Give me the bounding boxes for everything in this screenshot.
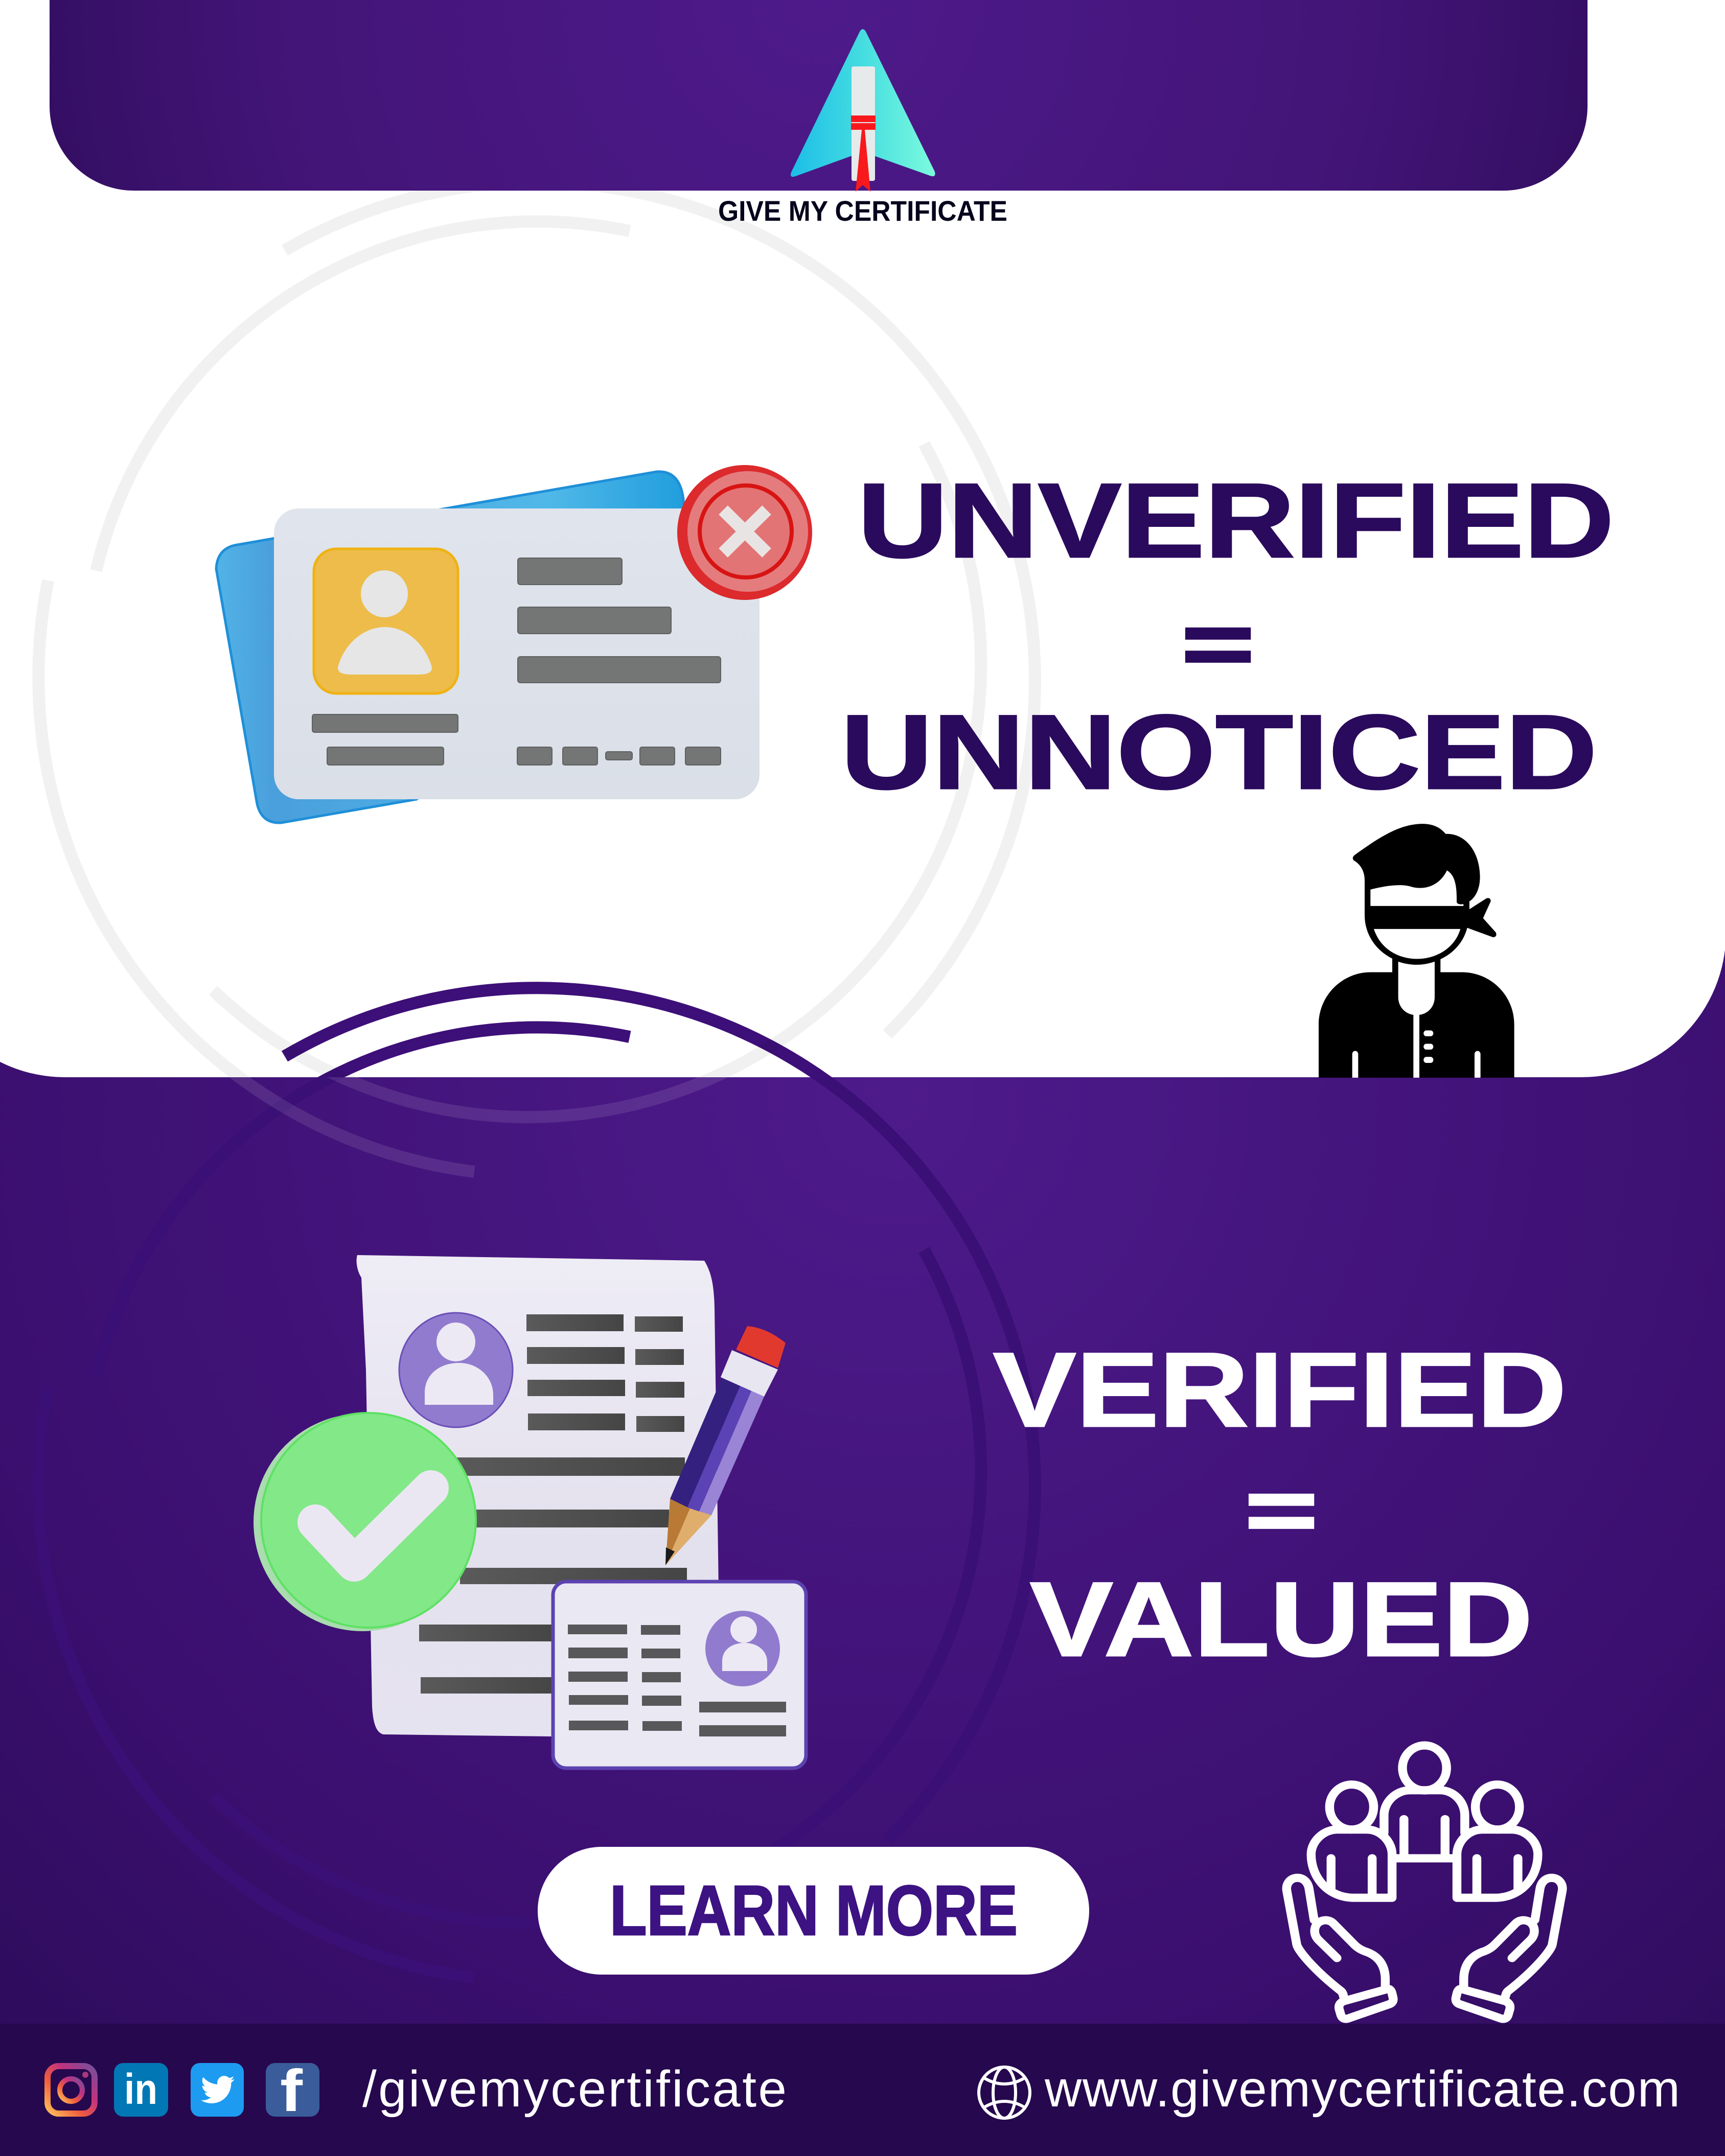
person body xyxy=(338,627,432,675)
equals sign: = xyxy=(1182,596,1254,692)
paper sheet xyxy=(357,1255,719,1738)
icon: facebook xyxy=(266,2057,319,2124)
left person and hand xyxy=(1286,1784,1393,2019)
equals sign: = xyxy=(1246,1462,1317,1558)
small card lines xyxy=(568,1625,786,1736)
heading: unnoticed: UNNOTICED xyxy=(841,693,1597,811)
icon: blindfolded man xyxy=(1319,824,1514,1078)
avatar circle xyxy=(399,1313,513,1427)
rings on white xyxy=(33,191,1041,1077)
white upper panel xyxy=(0,0,1725,1077)
icon: facebook: f xyxy=(280,2057,303,2124)
heading: valued: VALUED xyxy=(1030,1560,1533,1678)
logo: certificate arrow xyxy=(791,29,935,192)
top header bar xyxy=(50,0,1588,191)
icon: people in caring hands xyxy=(1286,1746,1562,2019)
website address: www.givemycertificate.com xyxy=(1044,2060,1680,2118)
icon: globe xyxy=(979,2067,1030,2118)
icon: linkedin xyxy=(114,2063,168,2117)
white front card xyxy=(274,508,760,799)
logo wordmark: GIVE MY CERTIFICATE xyxy=(718,195,1007,227)
illustration: unverified ID card xyxy=(216,465,812,823)
logo scroll xyxy=(852,66,875,181)
small ID card xyxy=(553,1582,806,1768)
social handle: /givemycertificate xyxy=(362,2060,787,2118)
blue back card xyxy=(216,472,690,823)
icon: linkedin: in xyxy=(124,2065,157,2113)
person head xyxy=(361,570,408,617)
logo ribbon xyxy=(851,115,876,192)
centre person xyxy=(1384,1746,1465,1858)
avatar head xyxy=(436,1323,475,1361)
data lines xyxy=(312,558,721,765)
silhouette xyxy=(1319,824,1514,1078)
document text lines xyxy=(419,1314,687,1694)
yellow photo tile xyxy=(314,549,458,693)
heading: unverified: UNVERIFIED xyxy=(858,461,1614,579)
green check badge xyxy=(254,1413,476,1631)
avatar body xyxy=(425,1363,493,1405)
rings on purple: faint decoration xyxy=(38,182,1035,1978)
icon: twitter xyxy=(191,2063,244,2117)
icon: instagram xyxy=(48,2066,95,2114)
right person and hand xyxy=(1456,1784,1562,2019)
button: learn more xyxy=(538,1847,1089,1975)
heading: verified: VERIFIED xyxy=(993,1331,1567,1449)
illustration: verified document xyxy=(254,1255,806,1768)
face cut-outs xyxy=(1352,870,1481,1078)
red rejected badge xyxy=(677,465,812,600)
pencil xyxy=(665,1326,786,1565)
small card avatar xyxy=(705,1611,780,1686)
button label: LEARN MORE xyxy=(610,1871,1018,1950)
logo arrow xyxy=(791,29,935,177)
footer bar xyxy=(0,2024,1725,2156)
